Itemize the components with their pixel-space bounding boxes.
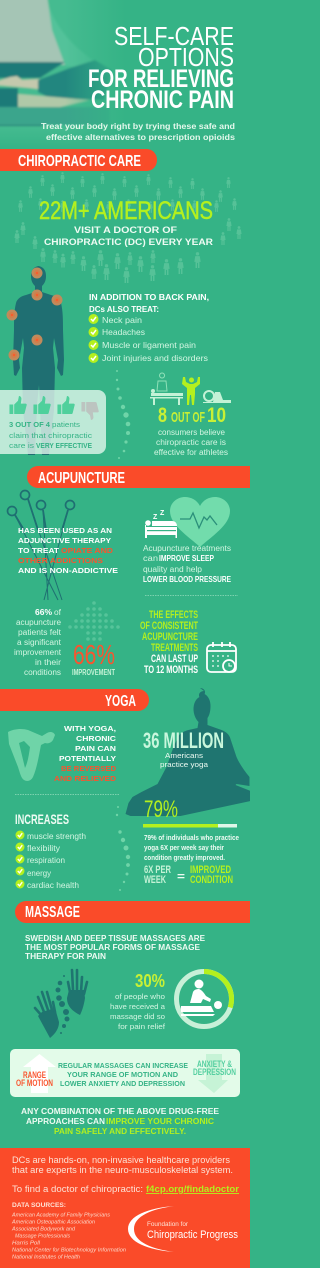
footer panel: National Institutes of Health (12, 1254, 80, 1260)
66% patients text: conditions (24, 668, 61, 677)
stat: 79%: 79% (144, 796, 178, 823)
66% patients text: patients felt (18, 628, 62, 637)
footer panel: DCs are hands-on, non-invasive healthcare providers (12, 1155, 230, 1165)
acupuncture addiction text: OTHER ADDICTIONS (18, 556, 103, 565)
acupuncture addiction text: TO TREAT (18, 546, 59, 555)
subtitle: Treat your body right by trying these safe and (41, 122, 235, 131)
footer panel: f4cp.org/findadoctor (146, 1184, 240, 1194)
DCs also treat list: Headaches (102, 327, 145, 337)
patient stat panel: claim that chiropractic (9, 431, 92, 440)
massage intro text: THERAPY FOR PAIN (25, 952, 106, 961)
conclusion text: IMPROVE YOUR CHRONIC (106, 1117, 214, 1126)
massage intro text (25, 934, 205, 961)
acupuncture addiction text: OPIATE AND (61, 546, 114, 555)
headline: 22M+ Americans: VISIT A DOCTOR OF (74, 225, 178, 235)
range of motion panel (10, 1049, 240, 1097)
stat: 36 million: Americans (165, 751, 203, 760)
footer panel: Massage Professionals (15, 1234, 70, 1240)
acupuncture sleep text: quality and help (143, 565, 203, 574)
subtitle: effective alternatives to prescription opioids (46, 133, 236, 142)
range of motion panel: OF MOTION (16, 1078, 53, 1089)
DCs also treat list: Muscle or ligament pain (102, 340, 196, 350)
title (88, 21, 234, 114)
stat: 30%: for pain relief (118, 1022, 166, 1031)
increases list: energy (27, 869, 51, 878)
stat: 66% improvement: 66% (73, 639, 115, 670)
footer panel: To find a doctor of chiropractic: (12, 1184, 143, 1194)
acupuncture sleep text: Acupuncture treatments (143, 544, 231, 553)
increases list: cardiac health (27, 881, 79, 890)
hero photo (0, 0, 140, 152)
effects text: TO 12 MONTHS (144, 664, 198, 676)
range of motion panel: ANXIETY & (197, 1059, 232, 1070)
equation: 6x per week equals improved condition: 6X PER (144, 864, 171, 876)
chart: 30% ring with massage icon (176, 971, 232, 1026)
footer panel: American Academy of Family Physicians (11, 1212, 110, 1218)
subtitle (41, 122, 236, 142)
conclusion text: APPROACHES CAN (26, 1117, 105, 1126)
dotted curve (116, 370, 130, 459)
DCs also treat list: DCs ALSO TREAT: (89, 305, 159, 314)
footer panel: Associated Bodywork and (11, 1226, 76, 1232)
stat: 8 out of 10 (154, 404, 228, 457)
increases list: INCREASES (15, 811, 69, 827)
range of motion panel: REGULAR MASSAGES CAN INCREASE (58, 1063, 188, 1070)
66% patients text: acupuncture (16, 618, 61, 627)
stat: 8 out of 10: chiropractic care is (156, 438, 226, 447)
66% patients text: in their (35, 658, 61, 667)
icons: athletes (150, 373, 231, 405)
DCs also treat list: Joint injuries and disorders (102, 353, 208, 363)
stat: 30%: massage did so (110, 1012, 165, 1021)
section header: yoga: YOGA (105, 693, 136, 710)
stat: 36 million: practice yoga (160, 760, 209, 769)
footer panel: National Center for Biotechnology Information (12, 1248, 126, 1254)
stat: 30% (110, 971, 166, 1031)
headline: 22M+ Americans (39, 197, 214, 247)
effects text: TREATMENTS (151, 642, 198, 654)
acupuncture sleep text (143, 544, 231, 584)
effects text: ACUPUNCTURE (142, 631, 198, 643)
section header: massage (15, 901, 250, 923)
increases list (15, 811, 86, 890)
increases list: muscle strength (27, 832, 86, 841)
patient stat panel (0, 390, 106, 454)
stat: 8 out of 10: 10 (207, 404, 226, 427)
body silhouette with pain points (6, 266, 64, 455)
acupuncture addiction text: AND IS NON-ADDICTIVE (18, 566, 118, 575)
icon: needles (8, 490, 74, 600)
section header: chiropractic care: CHIROPRACTIC CARE (18, 153, 141, 170)
stat: 30%: have received a (110, 1002, 166, 1011)
section header: yoga (0, 689, 149, 711)
increases list: respiration (27, 856, 65, 865)
icon: massage hands on spine (35, 970, 87, 1038)
conclusion text: ANY COMBINATION OF THE ABOVE DRUG-FREE (21, 1107, 220, 1116)
patient stat panel: VERY EFFECTIVE (36, 441, 92, 450)
effects text: THE EFFECTS (149, 609, 198, 621)
stat: 30%: 30% (135, 971, 165, 991)
66% patients text: a significant (17, 638, 62, 647)
footer panel: American Osteopathic Association (11, 1220, 95, 1226)
footer panel: that are experts in the neuro-musculoskeletal system. (12, 1165, 233, 1175)
icon: bed: Z (160, 510, 165, 517)
acupuncture sleep text: can (143, 554, 158, 563)
logo: Foundation for Chiropractic Progress (128, 1206, 238, 1252)
section header: acupuncture (27, 466, 250, 488)
headline: 22M+ Americans: CHIROPRACTIC (DC) EVERY YEAR (44, 237, 214, 247)
66% patients text: of (54, 608, 62, 617)
66% patients text: improvement (14, 648, 62, 657)
yoga text: POTENTIALLY (59, 754, 116, 763)
icon: yoga pose (8, 729, 55, 781)
footer panel: DATA SOURCES: (12, 1202, 66, 1209)
icon: heart with pulse (170, 497, 230, 547)
stat: 30%: of people who (115, 992, 165, 1001)
equation: 6x per week equals improved condition (144, 864, 233, 886)
yoga text: BE REVERSED (61, 764, 117, 773)
effects text: CAN LAST UP (151, 653, 198, 665)
icon: bed (145, 510, 177, 538)
section header: massage: MASSAGE (25, 904, 80, 921)
stat: 79%: yoga 6X per week say their (144, 843, 224, 852)
equation: 6x per week equals improved condition: IMPROVED (190, 864, 231, 876)
section header: chiropractic care (0, 149, 157, 171)
stat: 66% improvement: IMPROVEMENT (72, 668, 115, 677)
massage intro text: SWEDISH AND DEEP TISSUE MASSAGES ARE (25, 934, 205, 943)
stat: 8 out of 10: OUT OF (171, 409, 205, 426)
patient stat panel: patients (52, 420, 80, 429)
equation: 6x per week equals improved condition: WEEK (144, 874, 166, 886)
icon: calendar (207, 642, 236, 672)
acupuncture sleep text: LOWER BLOOD PRESSURE (143, 575, 231, 584)
stat: 36 million (143, 728, 224, 769)
section header: acupuncture: ACUPUNCTURE (38, 470, 125, 487)
meditating silhouette (126, 688, 250, 816)
logo: Foundation for Chiropractic Progress: Foundation for (147, 1221, 189, 1228)
footer panel: Harris Poll (12, 1240, 41, 1246)
stat: 8 out of 10: consumers believe (158, 428, 225, 437)
logo: Foundation for Chiropractic Progress: Chiropractic Progress (147, 1229, 238, 1241)
yoga text (54, 724, 117, 783)
66% patients text: 66% (35, 608, 52, 617)
DCs also treat list: Neck pain (102, 315, 142, 325)
range of motion panel: RANGE (23, 1070, 46, 1081)
conclusion text: PAIN SAFELY AND EFFECTIVELY. (54, 1127, 186, 1136)
massage intro text: THE MOST POPULAR FORMS OF MASSAGE (25, 943, 200, 952)
yoga text: WITH YOGA, (64, 724, 116, 733)
effects text: OF CONSISTENT (140, 620, 198, 632)
icon: bed: Z (153, 514, 158, 521)
DCs also treat list (88, 293, 209, 363)
stat: 79% (143, 796, 239, 862)
66% patients text (14, 608, 62, 677)
yoga text: PAIN CAN (75, 744, 116, 753)
yoga text: AND RELIEVED (54, 774, 117, 783)
equation: 6x per week equals improved condition: = (177, 871, 185, 883)
stat: 8 out of 10: effective for athletes (154, 448, 228, 457)
increases list: flexibility (27, 844, 60, 853)
acupuncture addiction text (18, 526, 118, 575)
dotted curve (116, 806, 130, 891)
acupuncture addiction text: ADJUNCTIVE THERAPY (18, 536, 111, 545)
stat: 79%: condition greatly improved. (144, 853, 225, 862)
conclusion text (21, 1107, 220, 1136)
acupuncture sleep text: IMPROVE SLEEP (159, 554, 214, 563)
dot arrow graphic (68, 601, 120, 641)
DCs also treat list: IN ADDITION TO BACK PAIN, (89, 293, 209, 302)
people crowd (14, 172, 242, 283)
equation: 6x per week equals improved condition: CONDITION (190, 874, 233, 886)
stat: 66% improvement (72, 639, 115, 677)
infographic (0, 0, 250, 1268)
footer panel (0, 1148, 250, 1268)
yoga text: CHRONIC (76, 734, 117, 743)
patient stat panel: 3 OUT OF 4 (9, 420, 51, 429)
acupuncture addiction text: HAS BEEN USED AS AN (18, 526, 112, 535)
patient stat panel: care is (9, 441, 34, 450)
effects text (140, 609, 198, 676)
range of motion panel: YOUR RANGE OF MOTION AND (67, 1072, 178, 1079)
range of motion panel: LOWER ANXIETY AND DEPRESSION (60, 1081, 185, 1088)
headline: 22M+ Americans: 22M+ AMERICANS (39, 197, 213, 225)
stat: 8 out of 10: 8 (158, 404, 167, 427)
